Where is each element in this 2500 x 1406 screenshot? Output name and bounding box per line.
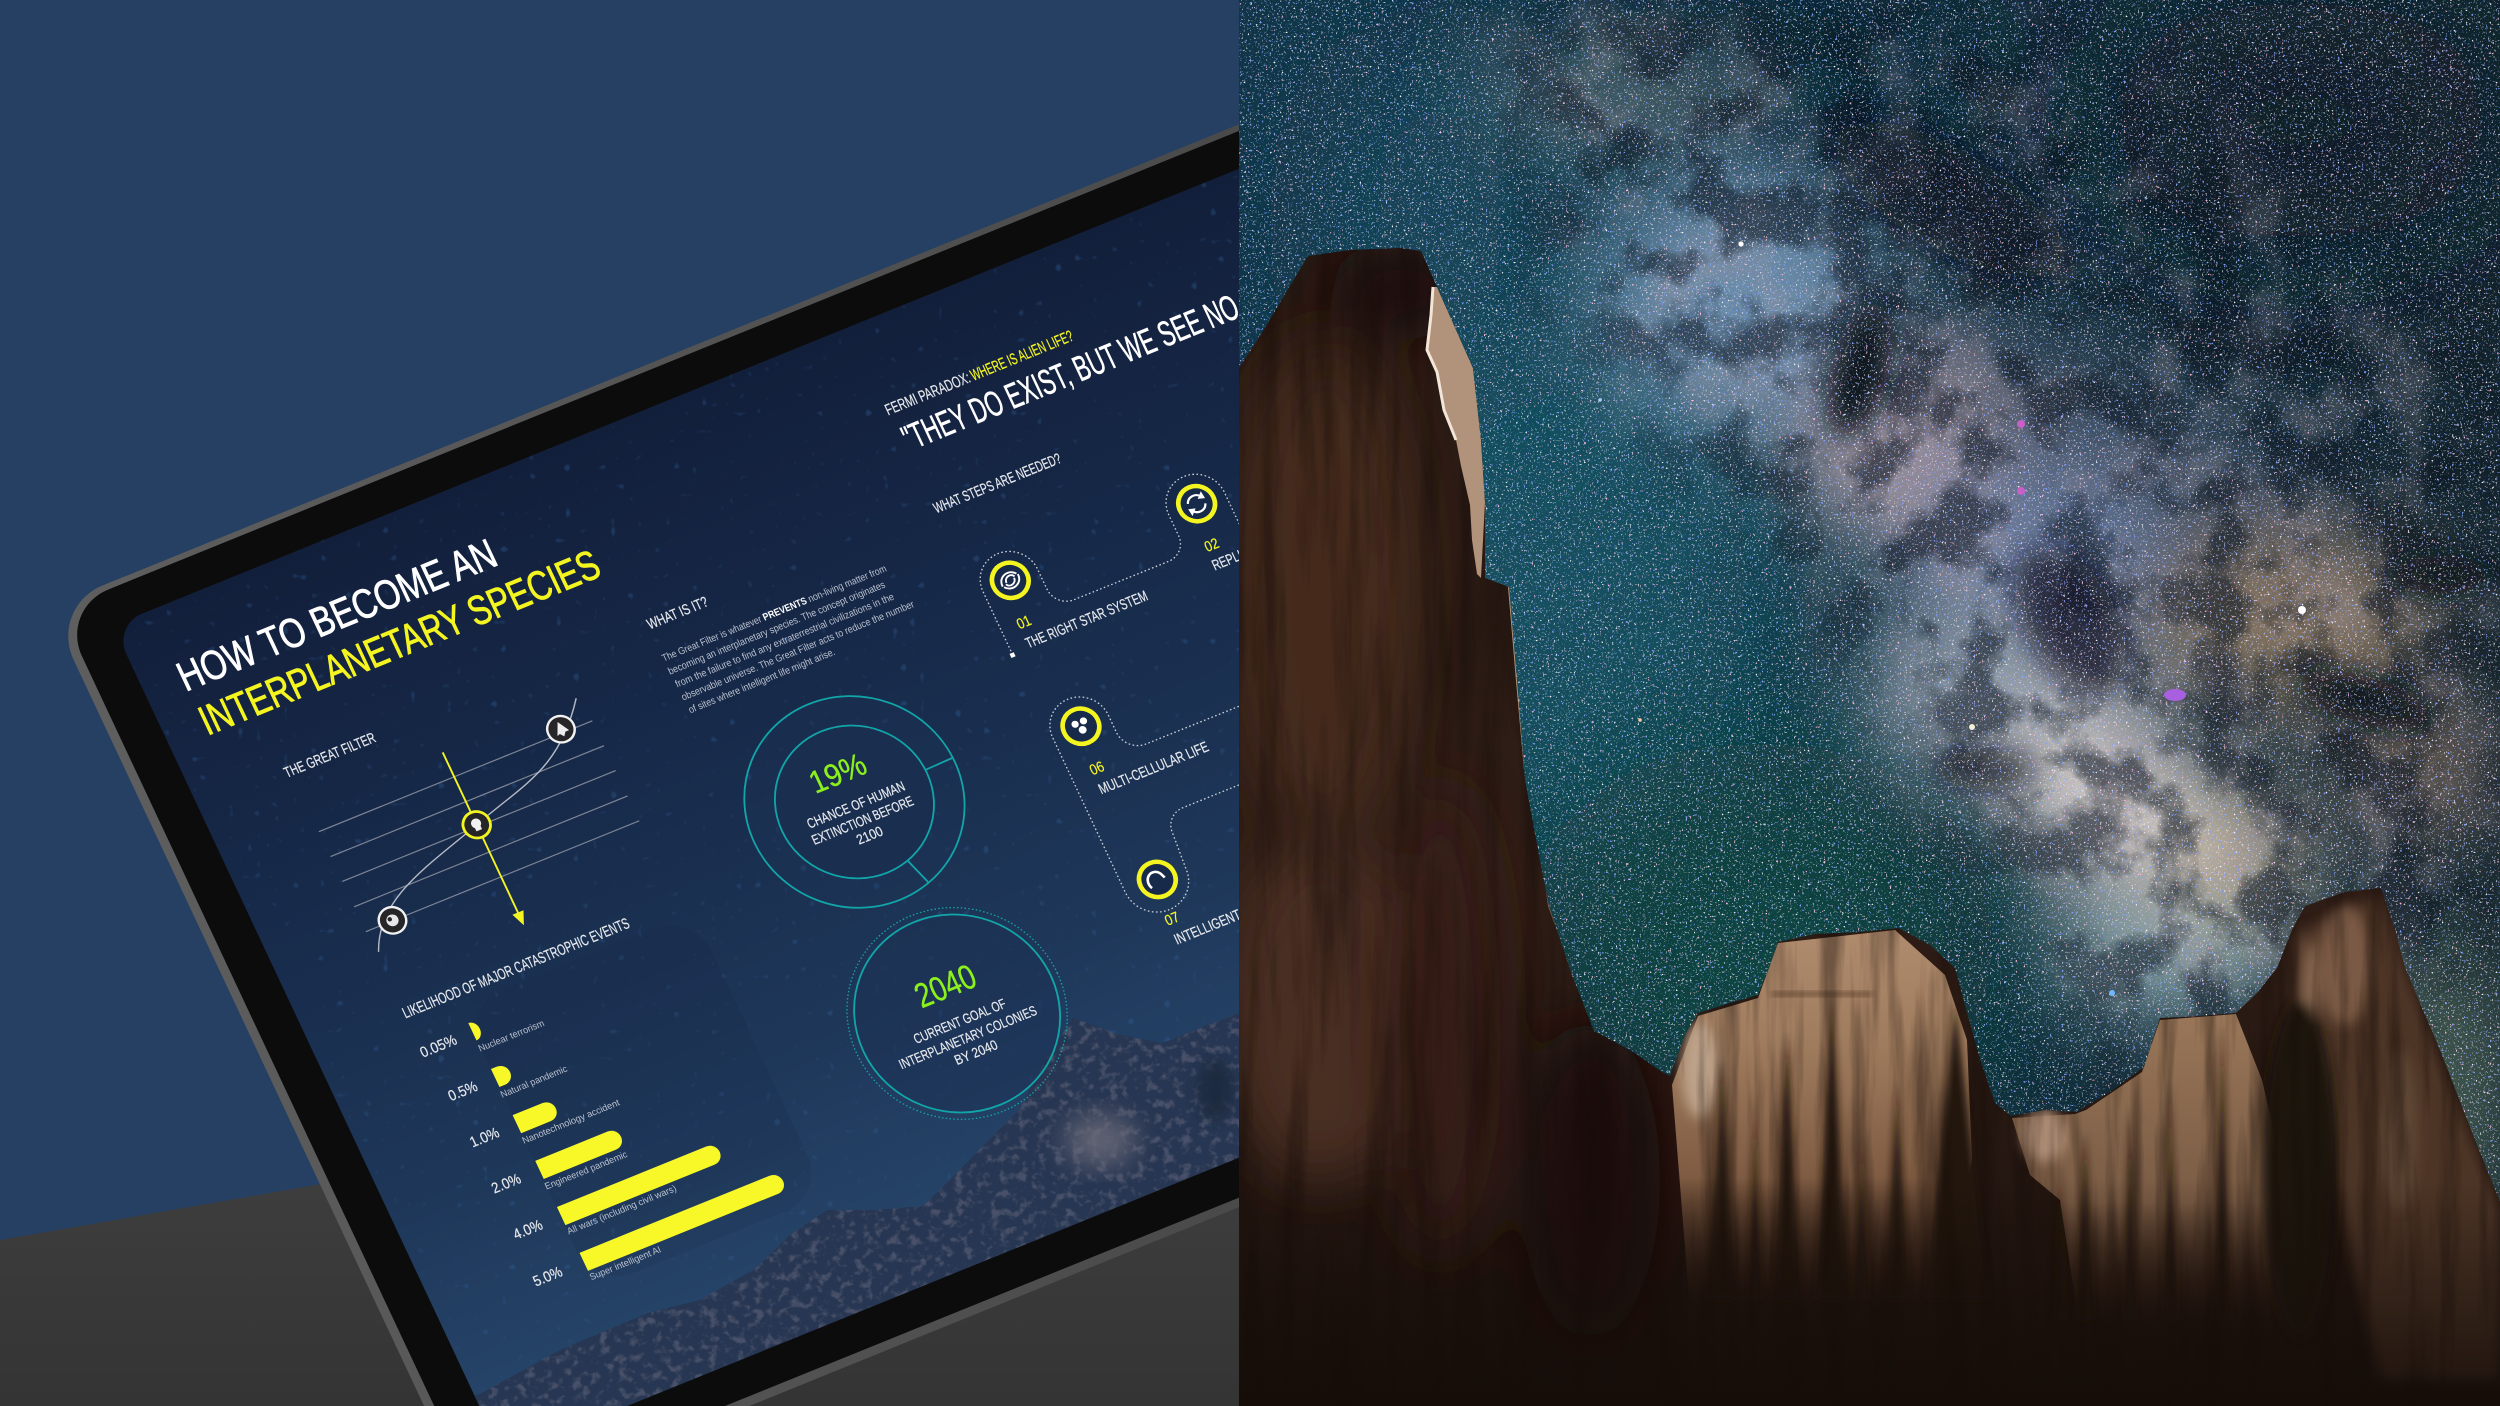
bar 0.5% natural pandemic: 0.5% [445, 1078, 480, 1105]
fermi paradox heading: FERMI PARADOX: [883, 370, 973, 419]
milky way glow [1470, 50, 2495, 1015]
stat circle 2040: CURRENT GOAL OF [911, 995, 1008, 1047]
left spire shading [1225, 240, 1660, 1340]
rock bottom shadow [1239, 1180, 2500, 1406]
step 07 intelligent life: 07 [1162, 909, 1182, 930]
step 02 replication [1172, 466, 1281, 577]
what is it text block: WHAT IS IT? [644, 594, 711, 633]
fermi paradox heading: "THEY DO EXIST, BUT WE SEE NO PROOF [895, 255, 1323, 458]
bar 2.0% engineered pandemic [488, 1128, 631, 1211]
dotted path lower [1040, 594, 1427, 922]
step 06 multi-cellular life: 06 [1087, 758, 1107, 779]
node: skull filter [458, 807, 495, 842]
stat circle 19% [708, 664, 1000, 940]
stat circle 19%: 2100 [854, 823, 886, 847]
fermi paradox heading [883, 236, 1323, 460]
tablet frame [68, 124, 1240, 1406]
likelihood of catastrophic events bar chart [399, 904, 793, 1305]
star field [1239, 0, 2500, 1406]
title: INTERPLANETARY SPECIES [191, 541, 607, 744]
screen content [176, 290, 1239, 1286]
stat circle 2040: 2040 [908, 957, 983, 1016]
bar 0.05% nuclear terrorism: Nuclear terrorism [477, 1018, 546, 1054]
step 06 multi-cellular life: MULTI-CELLULAR LIFE [1096, 739, 1212, 798]
background: navy wall [0, 0, 1240, 1406]
bar 1.0% nanotechnology accident: 1.0% [467, 1124, 502, 1151]
step 07 intelligent life: INTELLIGENT LIFE [1171, 897, 1268, 948]
milky way dust lanes [1239, 0, 2500, 1406]
spire lit edge [1427, 287, 1556, 925]
stat circle 2040 [811, 875, 1103, 1152]
bar 0.05% nuclear terrorism: 0.05% [417, 1032, 460, 1061]
bar 5.0% super intelligent AI: 5.0% [530, 1264, 565, 1290]
bar 0.5% natural pandemic [445, 1043, 570, 1119]
bar 2.0% engineered pandemic: Engineered pandemic [543, 1149, 630, 1192]
what is it text block: becoming an interplanetary species. The concept originates [667, 580, 887, 677]
stat circle 19%: 19% [803, 746, 872, 800]
bar 0.05% nuclear terrorism [416, 997, 546, 1075]
node: rocket [543, 712, 579, 746]
bar 4.0% all wars: All wars (including civil wars) [565, 1183, 678, 1237]
yellow filter arrow [437, 750, 529, 927]
what is it text block: The Great Filter is whatever PREVENTS non-living matter from [660, 564, 889, 664]
what is it text block: of sites where intelligent life might arise. [687, 647, 837, 716]
stat circle 19%: EXTINCTION BEFORE [809, 793, 916, 848]
title: HOW TO BECOME AN [170, 530, 504, 700]
right mesa lit face [2012, 895, 2500, 1380]
photo: milky way over rock spires [1225, 0, 2500, 1406]
step 01 the right star system: THE RIGHT STAR SYSTEM [1023, 588, 1151, 652]
tablet screen [124, 168, 1239, 1406]
step 07 intelligent life [1133, 831, 1268, 951]
screen background [113, 168, 1240, 1406]
node: bottom globe [374, 903, 411, 938]
mountains on screen [430, 1000, 1240, 1406]
fermi paradox heading: WHERE IS ALIEN LIFE? [968, 328, 1076, 384]
likelihood of catastrophic events bar chart: LIKELIHOOD OF MAJOR CATASTROPHIC EVENTS [400, 915, 632, 1022]
background: grey floor [0, 1024, 1240, 1406]
what is it text block [643, 524, 923, 717]
night sky base [1239, 0, 2500, 1406]
steps flow: WHAT STEPS ARE NEEDED? [931, 450, 1064, 517]
bar 4.0% all wars: 4.0% [510, 1217, 546, 1243]
bar 0.5% natural pandemic: Natural pandemic [499, 1064, 570, 1100]
step 02 replication: 02 [1202, 535, 1222, 556]
step 01 the right star system: 01 [1014, 612, 1034, 633]
chart backing panel [462, 912, 826, 1289]
stat circle 2040: BY 2040 [952, 1036, 1000, 1068]
bar 4.0% all wars [510, 1143, 729, 1256]
the great filter diagram [281, 653, 662, 982]
bar 5.0% super intelligent AI [529, 1172, 793, 1303]
middle mesa lit face [1672, 930, 1990, 1310]
bar 1.0% nanotechnology accident: Nanotechnology accident [521, 1097, 622, 1147]
the great filter diagram: THE GREAT FILTER [281, 730, 379, 781]
stat circle 19%: CHANCE OF HUMAN [804, 778, 907, 831]
step 06 multi-cellular life [1057, 670, 1212, 801]
bar 5.0% super intelligent AI: Super intelligent AI [588, 1245, 663, 1283]
bar 1.0% nanotechnology accident [466, 1077, 622, 1165]
steps flow [931, 381, 1443, 961]
start marker [1010, 652, 1016, 658]
what is it text block: from the failure to find any extraterrestrial civilizations in the [674, 592, 896, 690]
dotted path upper [970, 465, 1259, 665]
step 01 the right star system [986, 520, 1151, 654]
title [176, 538, 600, 736]
rock flute texture [1239, 240, 2500, 1406]
what is it text block: observable universe. The Great Filter acts to reduce the number [680, 599, 917, 703]
step 02 replication: REPLICATION [1209, 533, 1281, 574]
rock formations [1225, 240, 2500, 1406]
stat circle 2040: INTERPLANETARY COLONIES [896, 1002, 1039, 1072]
bar 2.0% engineered pandemic: 2.0% [489, 1171, 524, 1197]
